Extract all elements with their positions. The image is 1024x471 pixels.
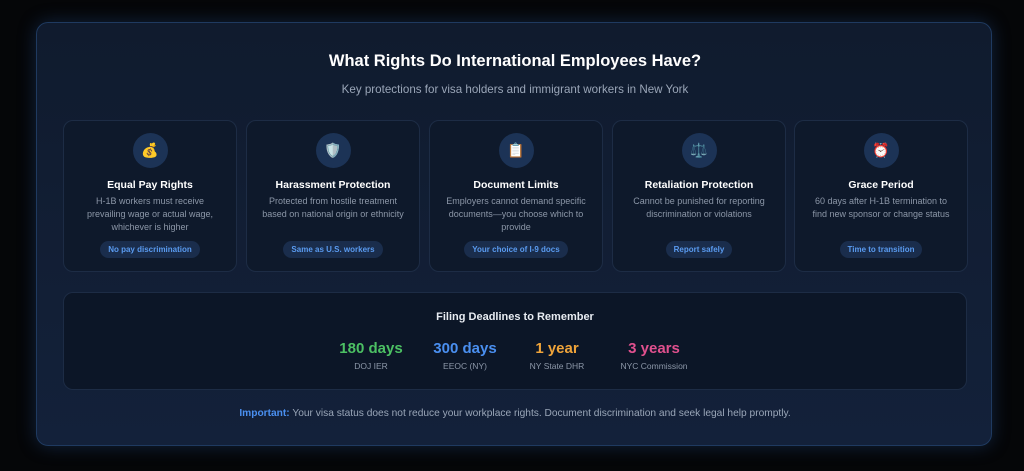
panel: retaliation: discrimination or violations [646,209,752,219]
deadline: EEOC [433,340,497,371]
deadline: NYS: 1 year [535,340,579,357]
panel: equal pay: whichever is higher [111,222,189,232]
deadline: EEOC: 300 days [433,340,497,357]
deadline: NYC: NYC Commission [620,361,688,371]
panel: harassment: 🛡️ [324,142,342,158]
deadline: NYC [620,340,688,371]
panel: retaliation [612,120,786,272]
title: What Rights Do International Employees Have? [329,52,701,70]
important note: Important: Your visa status does not reduce your workplace rights. Document discrimination and seek legal help promptly. [239,408,791,419]
subtitle: Key protections for visa holders and immigrant workers in New York [342,83,688,96]
panel: equal pay: 💰 [141,142,159,158]
deadline: NYS [530,340,584,371]
panel: document limits: Document Limits [473,179,559,191]
panel: document limits: Your choice of I-9 docs [472,245,560,254]
panel: retaliation: Report safely [674,245,724,254]
deadline: DOJ: 180 days [339,340,403,357]
deadline: EEOC: EEOC (NY) [443,361,487,371]
panel: retaliation: Cannot be punished for reporting [633,196,765,206]
deadline: NYC: 3 years [628,340,680,357]
panel: retaliation: ⚖️ [690,142,708,158]
panel: equal pay: prevailing wage or actual wage, [87,209,213,219]
panel: document limits: Employers cannot demand specific [446,196,586,206]
panel: harassment: based on national origin or ethnicity [262,209,404,219]
panel: harassment: Same as U.S. workers [291,245,375,254]
panel: equal pay: Equal Pay Rights [107,179,193,191]
panel: equal pay [63,120,237,272]
panel: equal pay: No pay discrimination [108,245,192,254]
panel: harassment [246,120,420,272]
deadline: DOJ: DOJ IER [354,361,388,371]
deadline: DOJ [339,340,403,371]
panel: document limits: 📋 [507,142,525,158]
panel: grace period [794,120,968,272]
panel: document limits: documents—you choose which to [449,209,583,219]
panel: grace period: find new sponsor or change status [812,209,950,219]
panel: filing deadlines [63,292,967,390]
panel: grace period: 60 days after H-1B termination to [815,196,947,206]
panel: harassment: Harassment Protection [276,179,390,191]
panel: grace period: Time to transition [848,245,914,254]
panel: document limits [429,120,603,272]
deadline: NYS: NY State DHR [530,361,584,371]
panel: grace period: Grace Period [848,179,914,191]
panel: retaliation: Retaliation Protection [645,179,753,191]
panel: equal pay: H-1B workers must receive [96,196,204,206]
panel: document limits: provide [501,222,531,232]
panel: harassment: Protected from hostile treatment [269,196,397,206]
panel: grace period: ⏰ [872,142,890,158]
deadlines heading: Filing Deadlines to Remember [436,311,594,323]
